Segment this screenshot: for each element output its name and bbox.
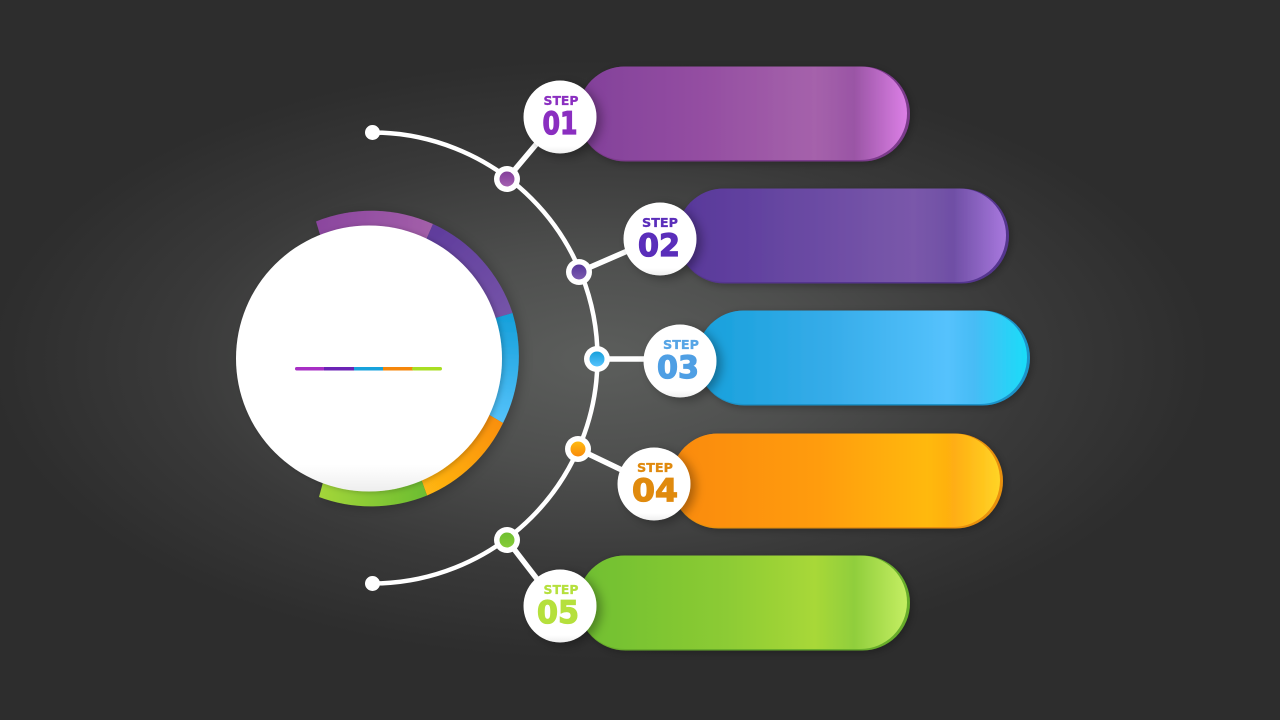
- step 2: [566, 188, 1009, 285]
- badge 3: 03: [657, 350, 699, 386]
- node 4: [565, 436, 591, 462]
- coloured ring: [316, 211, 519, 506]
- badge 3: STEP: [663, 337, 699, 352]
- badge 2: STEP: [642, 215, 678, 230]
- node 3: [584, 346, 610, 372]
- connector arc: [365, 125, 650, 591]
- step 4: [565, 434, 1003, 528]
- node 2: [566, 259, 592, 285]
- pill 4: [671, 434, 1003, 528]
- branch lines: [507, 135, 650, 588]
- pill 5: [578, 556, 910, 650]
- badge 4: 04: [632, 473, 678, 509]
- step 5: [494, 527, 910, 650]
- pill 3: [697, 310, 1030, 406]
- badge 1: 01: [542, 106, 578, 142]
- step 3: [584, 310, 1030, 406]
- colour divider line: [295, 367, 442, 370]
- badge 4: [618, 448, 690, 520]
- badge 2: 02: [638, 228, 680, 264]
- badge 5: [524, 570, 596, 642]
- node 5: [494, 527, 520, 553]
- step 1: [494, 66, 910, 192]
- badge 1: STEP: [544, 93, 578, 108]
- white circle: [236, 226, 502, 492]
- pill 2: [677, 188, 1009, 284]
- start and end dots: [365, 125, 380, 591]
- badge 5: 05: [537, 595, 579, 631]
- badge 2: [624, 202, 696, 276]
- node 1: [494, 166, 520, 192]
- circular hub: [236, 211, 519, 506]
- badge 3: [644, 324, 716, 398]
- badge 1: [524, 80, 596, 154]
- badge 4: STEP: [637, 460, 673, 475]
- badge 5: STEP: [544, 582, 578, 597]
- pill 1: [578, 66, 910, 162]
